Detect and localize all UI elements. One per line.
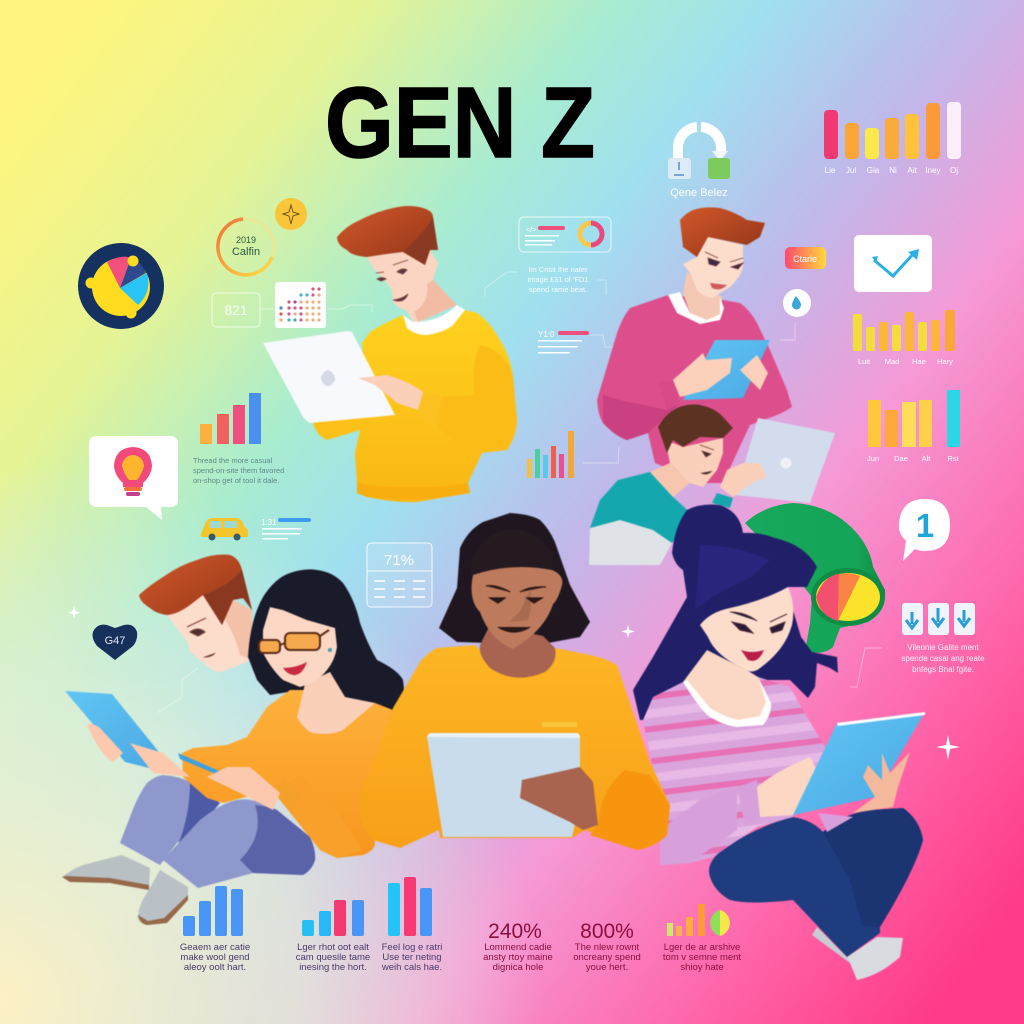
ring gauge with label [218,219,274,275]
bar chart: top right: Oj [950,166,958,175]
bar chart: right middle: Luit [858,357,871,366]
text block: right column [901,643,985,674]
text block: centre: spend rame beat. [529,285,587,294]
text block: centre [527,265,589,294]
statistic 240%: dignica hole [493,962,543,973]
icon: number 1 bubble [899,499,950,561]
statistic 240% [483,920,553,973]
bottom text 1: Geaem aer catie [180,942,250,953]
bottom text 4: shioy hate [680,962,724,973]
mini card: donut: </> [526,227,536,234]
hair [633,505,838,720]
bottom text 4: tom v semne ment [663,952,741,963]
bottom text 3: Use ter neting [382,952,442,963]
heart badge G47: G47 [105,635,125,647]
neck and face [367,250,457,324]
outlined date card: 821 [224,302,248,318]
hand [520,767,598,830]
bar chart: top right: Iney [925,166,941,175]
sweater [313,310,517,502]
text block: left column: on-shop get of tool it dale. [193,476,279,485]
bottom text 2: Lger rhot oot ealt [297,942,369,953]
loop icon with label: Qene Belez [670,187,728,199]
person: boy in yellow sweater with laptop [263,206,517,502]
collar [668,292,724,324]
bottom chart 3 [388,877,432,936]
bottom text 2 [296,942,370,973]
bar chart: right middle: Hae [912,357,926,366]
icon: pie badge [78,243,164,329]
face [683,237,743,298]
hands on tablet [87,724,123,762]
icon: number 1 bubble: 1 [916,507,934,544]
face [700,587,793,672]
connector lines [157,272,882,713]
large tablet [65,691,163,770]
bottom text 3 [381,942,442,973]
bottom text 1: aleoy oolt hart. [184,962,246,973]
bar chart: top right: Gia [867,166,880,175]
teal torso [590,472,695,543]
bar chart: right lower: Dae [894,454,908,463]
hand fingers [853,752,910,813]
hair [337,206,438,265]
tablet [683,340,770,400]
hair [439,513,590,644]
icon: yellow car [201,518,248,540]
mini bar chart: centre [527,431,574,478]
sparkle: centre [621,625,635,638]
ring gauge with label: Calfin [232,246,260,258]
near leg [163,799,315,888]
bar chart: right middle: Hary [937,357,953,366]
gradient tag [785,247,826,269]
sweater [182,690,393,858]
hands [673,353,732,397]
ring gauge with label: 2019 [236,235,256,245]
sparkle: left [68,606,80,619]
bar chart: top right: Ni [889,166,897,175]
loop icon with label [668,127,730,199]
statistic 240%: Lommend cadie [484,942,552,953]
green speech blob with pie [745,503,885,653]
bar chart: right middle: Mad [885,357,899,366]
glasses [259,633,320,653]
far leg [120,775,220,865]
bar chart: right lower: Alt [922,454,931,463]
mini bar chart: left [200,393,261,444]
bottom chart 2 [302,900,364,936]
heart badge G47 [92,625,137,660]
mini card: pink line [538,330,589,354]
eyes and mouth [376,260,408,301]
bottom text 2: cam quesile tame [296,952,370,963]
bottom text 3: weih cals hae. [381,962,442,973]
icon: lightbulb speech bubble [89,436,178,520]
mini stat lines: 1:31 [261,518,277,527]
text block: left column [193,456,284,485]
bar chart: right lower [867,390,960,463]
bar chart: top right: Jul [846,166,856,175]
neck and chest [480,625,556,678]
hair [658,404,733,453]
laptop [263,331,395,423]
sparkle: right [936,735,960,760]
text block: centre: image £31 of 'FD1 [527,275,589,284]
bottom text 1 [180,942,250,973]
face [263,607,337,687]
stat card 71% [367,543,432,607]
bar chart: right lower: Jun [867,454,879,463]
text block: right column: bnfegs Bnal fgite. [912,665,974,674]
hand on tablet [757,757,817,817]
text block: left column: spend-on-site them favored [193,466,284,475]
face [167,595,252,672]
bottom chart 4 with pie [667,904,730,936]
person: woman with glasses in orange sweater [62,569,405,925]
mini card: donut [519,217,611,252]
hand [358,375,423,410]
dot matrix card [275,282,326,328]
sweater [643,677,827,865]
shoes [812,927,850,963]
bar chart: right lower: Rst [947,454,960,463]
tablet [793,712,925,815]
statistic 800%: The nlew rownt [575,942,640,953]
sweater [360,645,670,850]
text block: centre: Im Cnsit Ihe nater [528,265,588,274]
statistic 800%: 800% [580,920,634,943]
gradient tag: Ctarle [793,254,817,264]
outlined date card [212,293,372,327]
bar chart: top right: Lie [825,166,836,175]
icon row: down arrows [902,603,975,635]
hair [680,207,765,257]
person: woman with navy hair and striped top [633,505,925,980]
bottom text 4: Lger de ar arshive [664,942,740,953]
trend arrow card [854,235,932,292]
statistic 800%: youe hert. [586,962,628,973]
bar chart: top right [824,102,961,175]
bar chart: right middle [853,310,955,366]
person: boy in teal with tablet [589,404,835,565]
tablet [735,418,835,503]
face [472,567,562,649]
mini stat lines [261,518,311,540]
title: GEN Z [325,67,595,179]
bottom chart 1 [183,886,243,936]
small tablet [178,753,240,782]
text block: right column: spende casal ang reate [901,654,985,663]
mini card: pink line: Y1:0 [538,330,555,339]
jeans [709,808,923,957]
sweater [597,295,792,483]
chest and neck [297,672,375,734]
statistic 800% [573,920,641,973]
shoes [62,855,150,890]
collar [403,305,465,335]
icon: water drop circle [783,289,811,317]
hand [720,463,767,497]
statistic 240%: 240% [488,920,542,943]
text block: left column: Thread the more casual [193,456,273,465]
grey shirt [589,520,672,565]
hair fringe [470,530,553,575]
bottom text 3: Feel log e ratri [382,942,442,953]
icon: yellow star badge [275,198,307,230]
neck and face [650,463,690,497]
hair [139,555,252,625]
person: boy with red hair, head only [139,555,252,672]
statistic 800%: oncreany spend [573,952,641,963]
bottom text 2: inesing the hort. [299,962,367,973]
bottom text 4 [663,942,741,973]
hair [248,569,405,712]
bar chart: top right: Ait [907,166,917,175]
statistic 240%: ansty rtoy maine [483,952,553,963]
bottom text 1: make wool gend [180,952,250,963]
chest [683,650,770,726]
person: centre with yellow sweater [360,513,670,850]
text block: right column: Vileonle Galite ment [907,643,980,652]
collar [683,677,771,727]
tablet [427,733,580,837]
person: boy in pink sweater with tablet [597,207,792,483]
stat card 71%: 71% [384,552,414,569]
neck [683,272,722,322]
